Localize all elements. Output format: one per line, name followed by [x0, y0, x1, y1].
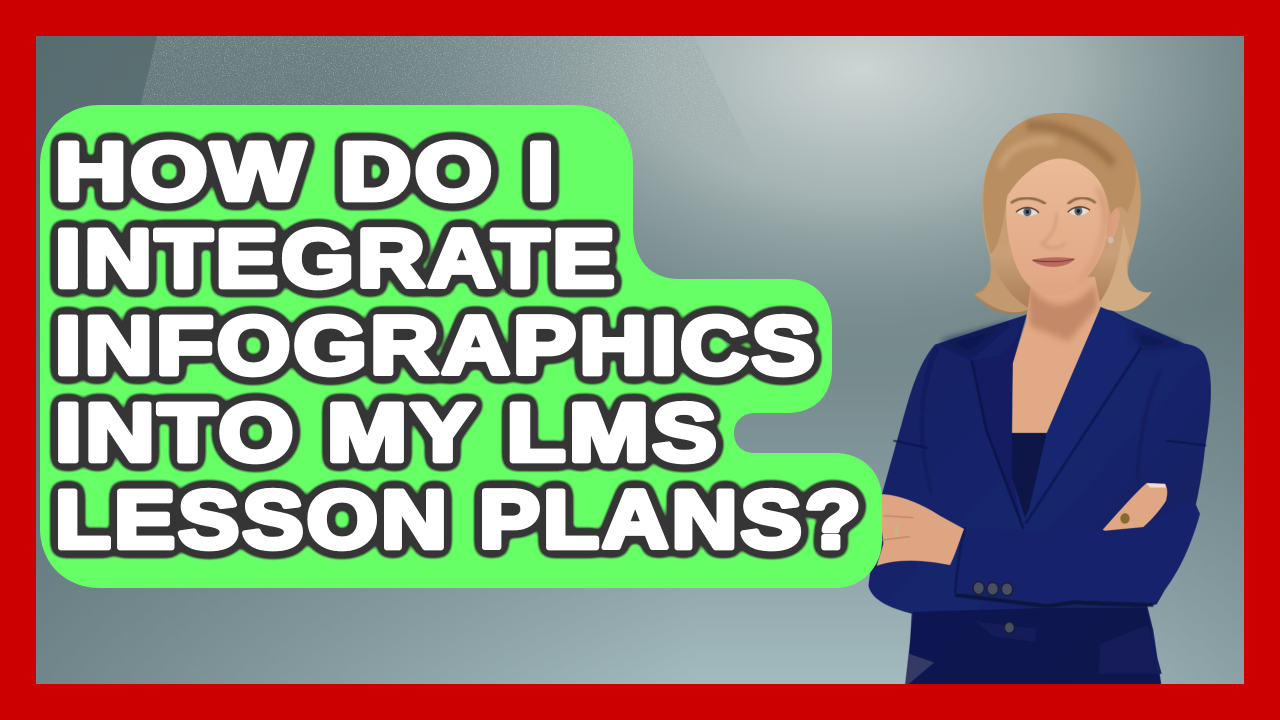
side face shadow: [1077, 187, 1108, 284]
title line 2: INTEGRATE: [55, 214, 618, 304]
left lapel: [972, 314, 1027, 529]
title line 4: INTO MY LMS: [55, 388, 720, 478]
title background: green rounded stepped panel: [40, 105, 882, 588]
hand: far right on sleeve: [1103, 483, 1167, 533]
wedding ring: [895, 525, 898, 537]
ring: [1120, 513, 1130, 524]
eyebrows: [1012, 198, 1095, 203]
hand: near left on elbow: [877, 494, 964, 566]
nose: [1042, 213, 1066, 248]
shoulder shadows: [940, 322, 1185, 356]
inner top: [1012, 433, 1047, 518]
title: How do I integrate infographics into my LMS lesson plans?: [55, 126, 864, 566]
ear: [1107, 207, 1120, 239]
forearm sleeve: [955, 499, 1200, 606]
eyes: [1016, 206, 1090, 216]
hair back: [973, 113, 1152, 314]
lower blazer shadow: [905, 608, 1160, 685]
front hair sweep: [983, 113, 1136, 254]
title line 3: INFOGRAPHICS: [55, 300, 818, 392]
title line 1: HOW DO I: [55, 126, 558, 218]
blazer: [868, 305, 1211, 687]
neck and chest: [1012, 277, 1101, 433]
earring: [1108, 237, 1114, 243]
smile and lips: [1032, 257, 1075, 267]
face: [1006, 156, 1109, 296]
title line 5: LESSON PLANS?: [55, 474, 864, 566]
illustration: smiling woman in navy blazer with crossed arms: [868, 113, 1211, 687]
sleeve buttons: [973, 582, 1014, 633]
right lapel: [1026, 305, 1141, 523]
